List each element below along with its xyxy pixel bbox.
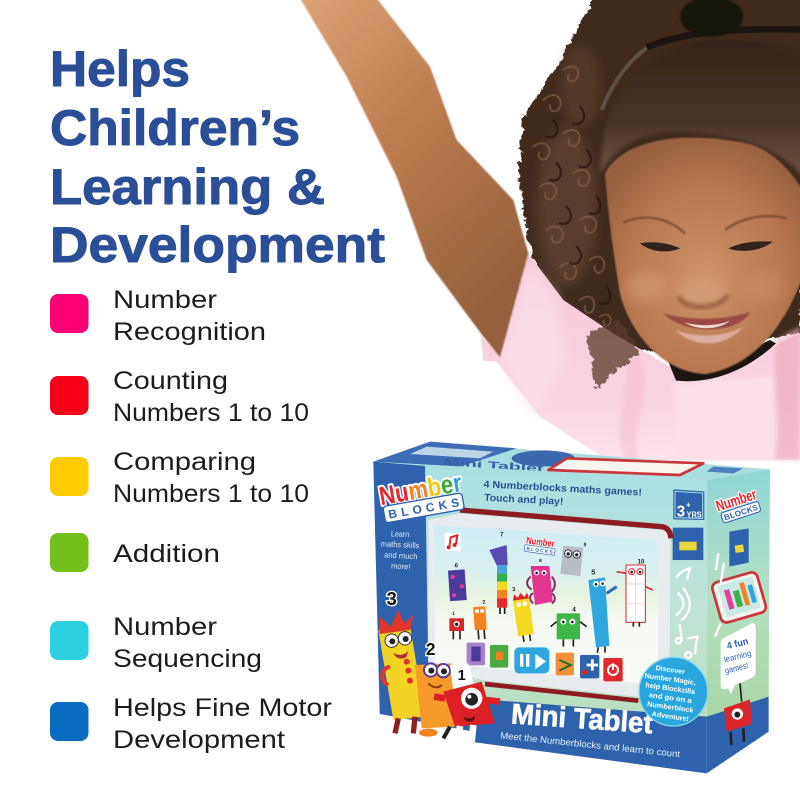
- nose shadow: [678, 295, 728, 307]
- character 8 pink: 8: [539, 558, 542, 564]
- item: fine motor development: Helps Fine Motor: [113, 694, 332, 722]
- character 3: 3: [386, 588, 397, 609]
- side tablet image: [711, 571, 767, 624]
- face: [605, 138, 800, 374]
- round adventure badge: help Blockzilla: [645, 682, 696, 696]
- character 10: [617, 559, 653, 627]
- age badge: YRS: [687, 510, 702, 519]
- tablet device: [428, 510, 671, 701]
- character 1: [434, 663, 500, 742]
- round adventure badge: Numberblock: [647, 701, 694, 715]
- box strapline: Meet the Numberblocks and learn to count: [500, 730, 681, 759]
- headline copy: Touch and play!: [484, 493, 564, 508]
- age badge: 3: [677, 504, 685, 521]
- side panel copy: [381, 529, 420, 572]
- character 5: 5: [591, 568, 595, 577]
- main box logo: BLOCKS: [387, 495, 460, 522]
- item: comparing numbers: [50, 448, 309, 508]
- item: number recognition: [50, 286, 266, 346]
- character 8 pink: [527, 558, 555, 605]
- character 7 rainbow: 7: [500, 533, 504, 539]
- game buttons: [467, 643, 623, 681]
- character 7 rainbow: [489, 533, 508, 614]
- tablet screen: [434, 525, 658, 685]
- character 3: [378, 588, 425, 733]
- side music notes: [715, 553, 724, 637]
- character 5: [588, 568, 617, 653]
- age badge: [673, 489, 704, 521]
- character 6: [448, 563, 467, 601]
- product box: Mini Tablet: [373, 442, 770, 773]
- box top face: [373, 442, 770, 480]
- character 3 small: 3: [512, 587, 516, 593]
- character 2: 2: [426, 639, 435, 659]
- character 10: 10: [638, 559, 645, 565]
- item: number recognition: Recognition: [113, 318, 266, 346]
- character 1 small: 1: [452, 611, 455, 617]
- box front face: [373, 462, 707, 773]
- box title: Mini Tablet: Mini Tablet: [510, 698, 654, 740]
- screen logo: BLOCKS: [526, 546, 554, 556]
- item: comparing numbers: Numbers 1 to 10: [113, 480, 309, 508]
- main box logo: Number: [377, 467, 464, 511]
- headband and knot: [602, 0, 800, 110]
- raised arm: [300, 0, 528, 357]
- teeth: [685, 321, 730, 328]
- character 4: 4: [572, 607, 576, 614]
- screen icon: music: [444, 533, 461, 551]
- round adventure badge: Discover: [655, 665, 685, 676]
- side red character: [724, 683, 752, 745]
- left blue panel: [373, 462, 470, 742]
- heading: Helps: [50, 41, 190, 97]
- side logo: BLOCKS: [723, 503, 760, 522]
- music notes on front: [676, 568, 697, 658]
- item: addition: Addition: [113, 540, 220, 568]
- round adventure badge: [639, 657, 708, 726]
- lower lip: [675, 327, 743, 343]
- round adventure badge: Number Magic,: [644, 673, 696, 687]
- photo: girl with raised arm: [300, 0, 800, 460]
- heading: Learning &: [50, 159, 325, 215]
- side panel copy: and much: [384, 550, 418, 561]
- eyebrow left: [623, 218, 685, 233]
- speech bubble: 4 fun learning games: learning: [723, 648, 753, 664]
- character 1 small: [449, 611, 464, 639]
- box top face: Mini Tablet: [443, 457, 545, 475]
- box side face: [707, 469, 770, 773]
- character 9 grey: [560, 540, 587, 576]
- screen logo: [524, 535, 557, 556]
- screen logo: Number: [526, 535, 555, 550]
- character 3 small: [511, 585, 535, 643]
- channel block: [673, 528, 703, 560]
- round adventure badge: Adventure!: [651, 711, 689, 723]
- eyebrow right: [725, 216, 787, 230]
- side panel copy: Learn: [391, 529, 409, 539]
- collar: [668, 340, 776, 381]
- eye left: [640, 242, 680, 251]
- curls over the shirt: [587, 320, 640, 390]
- bottom blue band: [470, 698, 707, 773]
- heading: Development: [50, 217, 385, 273]
- round adventure badge: and go on a: [648, 692, 692, 705]
- item: number sequencing: Number: [113, 613, 217, 641]
- item: counting numbers: Counting: [113, 367, 228, 395]
- item: counting numbers: Numbers 1 to 10: [113, 399, 309, 427]
- side panel copy: maths skills: [381, 539, 420, 550]
- character 4: [551, 607, 587, 647]
- character 9 grey: 9: [583, 542, 587, 548]
- item: counting numbers: [50, 367, 309, 427]
- side channel logo block: [729, 528, 749, 567]
- item: comparing numbers: Comparing: [113, 448, 256, 476]
- item: number recognition: Number: [113, 286, 217, 314]
- side logo: Number: [714, 486, 759, 515]
- character 2: [415, 639, 455, 737]
- side logo: [714, 486, 762, 524]
- heading: [50, 41, 385, 273]
- item: fine motor development: [50, 694, 332, 754]
- character 2 small: [473, 600, 488, 640]
- speech bubble: 4 fun learning games: games!: [724, 660, 749, 676]
- item: number sequencing: Sequencing: [113, 645, 262, 673]
- heading: Children’s: [50, 100, 300, 156]
- item: fine motor development: Development: [113, 726, 285, 754]
- headline copy: [483, 479, 642, 508]
- speech bubble: 4 fun learning games: [721, 623, 756, 695]
- character 1: 1: [458, 668, 466, 684]
- side panel copy: more!: [391, 562, 411, 572]
- item: addition: [50, 533, 220, 572]
- speech bubble: 4 fun learning games: 4 fun: [726, 636, 750, 652]
- mouth: [663, 312, 751, 329]
- headline copy: 4 Numberblocks maths games!: [483, 479, 642, 499]
- character 6: 6: [454, 563, 459, 569]
- age badge: +: [686, 500, 691, 509]
- shirt: [481, 253, 800, 460]
- eye right: [728, 241, 773, 251]
- item: number sequencing: [50, 613, 262, 673]
- character 2 small: 2: [482, 600, 486, 606]
- hair mass: [518, 0, 800, 387]
- ground under characters: [377, 713, 473, 743]
